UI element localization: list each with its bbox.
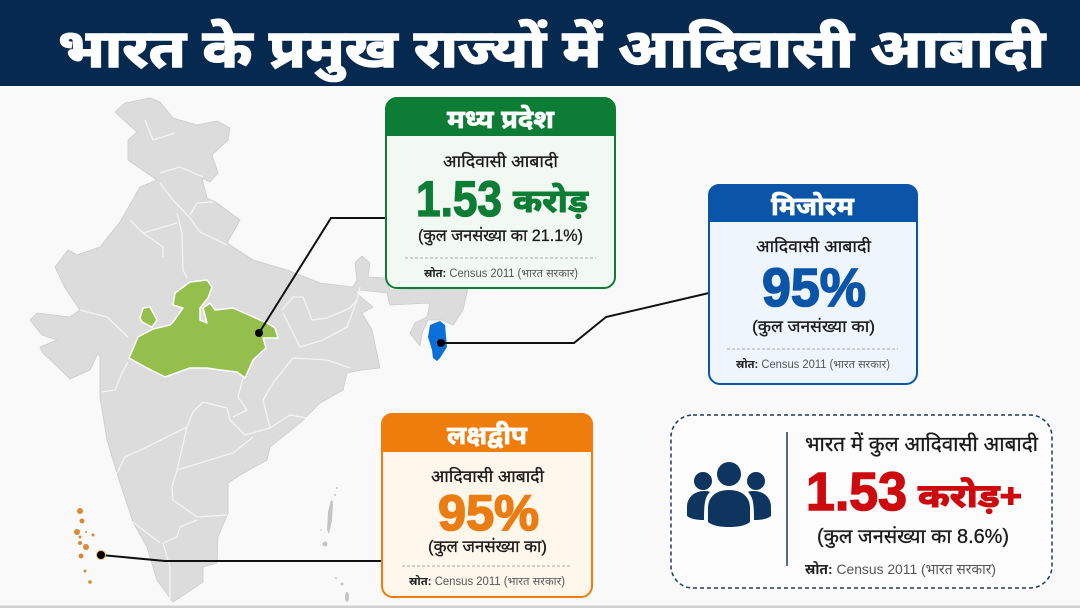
label: आदिवासी आबादी	[443, 151, 559, 171]
figure: 95%	[438, 485, 539, 541]
heading: लक्षद्वीप	[447, 420, 528, 450]
label: आदिवासी आबादी	[431, 466, 545, 486]
connector: Madhya Pradesh	[255, 218, 387, 337]
figure: 95%	[762, 258, 866, 318]
heading: भारत में कुल आदिवासी आबादी	[805, 432, 1039, 457]
highlighted state: Madhya Pradesh	[129, 280, 278, 378]
title banner	[0, 0, 1080, 86]
source: स्रोत: Census 2011 (भारत सरकार)	[409, 575, 565, 588]
highlighted state: Mizoram	[428, 321, 447, 361]
source: स्रोत: Census 2011 (भारत सरकार)	[805, 561, 996, 577]
figure: करोड़	[513, 183, 589, 219]
connector: Mizoram	[437, 293, 709, 347]
figure	[416, 171, 589, 227]
islands: Andaman and Nicobar	[320, 487, 349, 602]
card: Lakshadweep	[381, 413, 593, 597]
map of India	[30, 98, 468, 602]
icon: group of people	[687, 462, 771, 527]
figure: 1.53	[416, 171, 502, 227]
source: स्रोत: Census 2011 (भारत सरकार)	[424, 267, 578, 280]
connector: Lakshadweep	[96, 550, 382, 561]
highlighted islands: Lakshadweep	[74, 508, 94, 584]
panel: national total	[671, 415, 1052, 588]
heading: मिजोरम	[771, 191, 855, 221]
source: स्रोत: Census 2011 (भारत सरकार)	[736, 358, 890, 371]
label: आदिवासी आबादी	[756, 236, 872, 256]
card: Mizoram	[708, 184, 918, 384]
share note: (कुल जनसंख्या का 21.1%)	[418, 226, 583, 247]
figure	[806, 462, 1022, 522]
share note: (कुल जनसंख्या का 8.6%)	[817, 525, 1009, 549]
title banner: भारत के प्रमुख राज्यों में आदिवासी आबादी	[58, 19, 1047, 82]
card: Madhya Pradesh	[386, 97, 615, 288]
figure: 1.53	[806, 462, 907, 522]
share note: (कुल जनसंख्या का)	[428, 537, 547, 558]
heading: मध्य प्रदेश	[447, 104, 555, 134]
share note: (कुल जनसंख्या का)	[752, 317, 875, 338]
figure: करोड़+	[918, 477, 1022, 514]
